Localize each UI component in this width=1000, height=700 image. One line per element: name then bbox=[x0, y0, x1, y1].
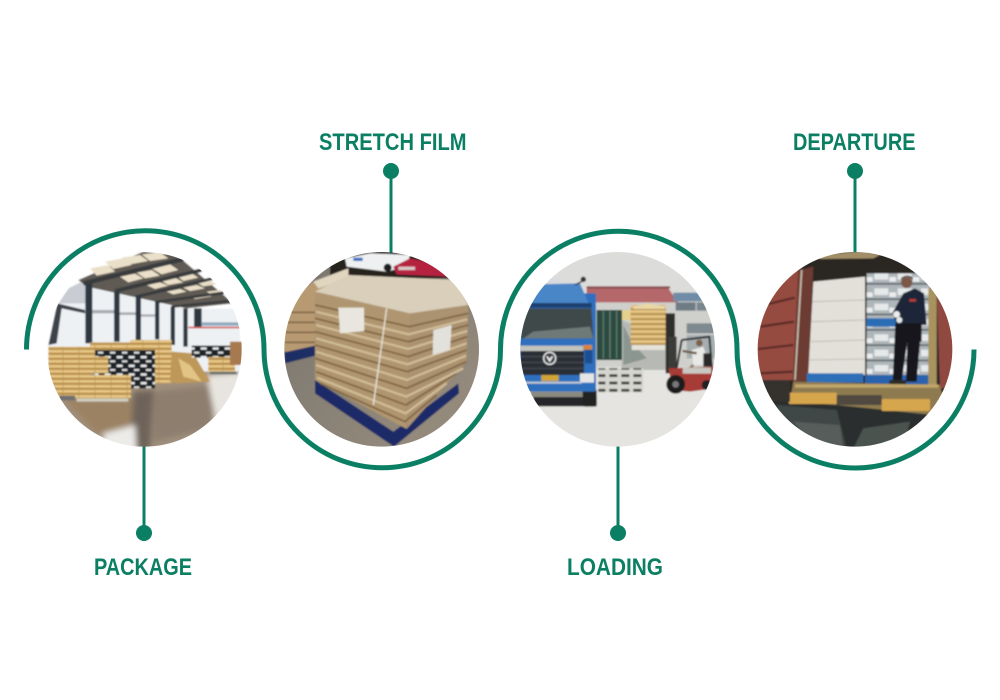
infographic: logistics process bbox=[24, 133, 976, 575]
step: stretch film bbox=[280, 129, 483, 452]
connector and dot: package bbox=[136, 445, 152, 541]
photo: truck and forklift bbox=[517, 248, 720, 452]
connector and dot: loading bbox=[610, 445, 626, 541]
connector and dot: stretch film bbox=[383, 163, 399, 253]
wave line connecting the four photos bbox=[26, 231, 974, 468]
heading: package: PACKAGE bbox=[94, 554, 192, 581]
connector and dot: departure bbox=[847, 163, 863, 253]
photo: wrapped pallet bbox=[280, 248, 483, 452]
step: departure bbox=[753, 129, 957, 452]
step: loading bbox=[517, 248, 720, 581]
heading: stretch film: STRETCH FILM bbox=[319, 129, 466, 156]
heading: departure: DEPARTURE bbox=[793, 129, 916, 156]
heading: loading: LOADING bbox=[567, 554, 663, 581]
step: package bbox=[43, 248, 247, 581]
photo: container being loaded bbox=[753, 248, 957, 452]
photo: warehouse with stacked bags bbox=[43, 248, 247, 452]
